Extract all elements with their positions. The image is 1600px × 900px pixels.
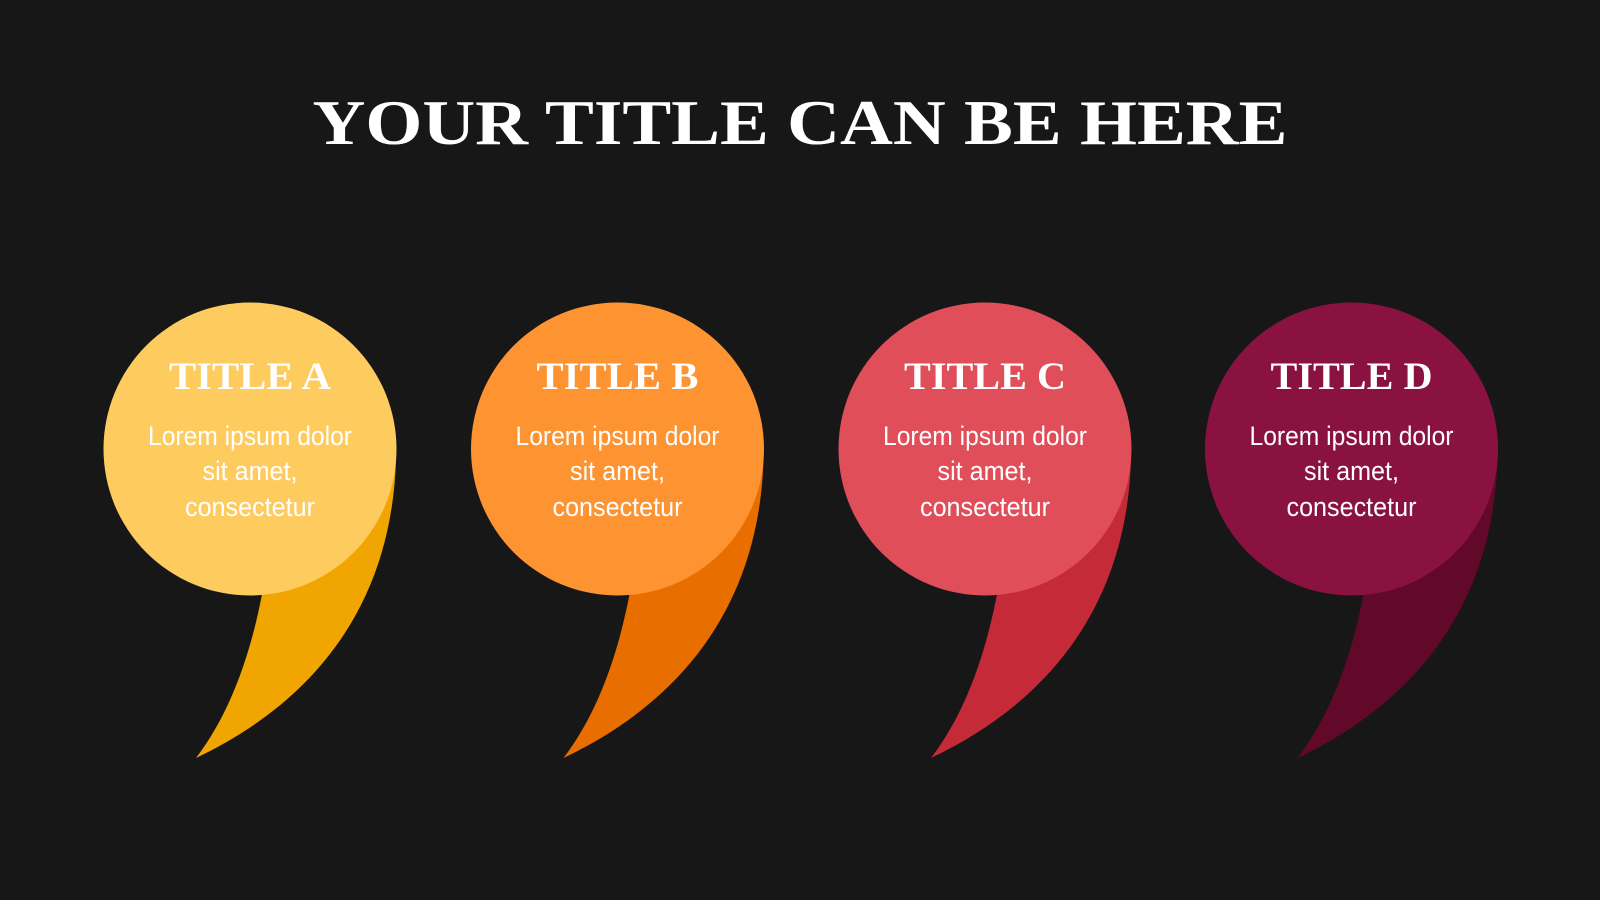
title: YOUR TITLE CAN BE HERE [312, 87, 1288, 158]
panel: title C [838, 302, 1132, 758]
circle D [1205, 302, 1498, 596]
text D [1250, 421, 1454, 522]
text B: Lorem ipsum dolor [516, 421, 720, 451]
tail C [931, 459, 1131, 758]
text B: consectetur [552, 492, 683, 522]
text D: Lorem ipsum dolor [1250, 421, 1454, 451]
text C: sit amet, [938, 456, 1032, 486]
heading C: TITLE C [904, 355, 1066, 398]
circle A [104, 302, 396, 596]
text B [516, 421, 720, 522]
text B: sit amet, [570, 456, 665, 486]
text D: consectetur [1286, 492, 1417, 522]
panel: title A [104, 302, 396, 758]
text C: consectetur [920, 492, 1050, 522]
heading A: TITLE A [169, 355, 331, 398]
heading D: TITLE D [1270, 355, 1432, 398]
text A [148, 421, 352, 522]
text C: Lorem ipsum dolor [883, 421, 1087, 451]
heading B: TITLE B [536, 355, 698, 398]
text A: sit amet, [202, 456, 298, 486]
text A: consectetur [185, 492, 315, 522]
panel: title D [1205, 302, 1498, 758]
text D: sit amet, [1304, 456, 1399, 486]
tail A [196, 459, 396, 758]
text A: Lorem ipsum dolor [148, 421, 352, 451]
circle B [471, 302, 764, 596]
circle C [838, 302, 1132, 596]
tail D [1298, 459, 1498, 758]
panel: title B [471, 302, 764, 758]
text C [883, 421, 1087, 522]
tail B [564, 459, 764, 758]
